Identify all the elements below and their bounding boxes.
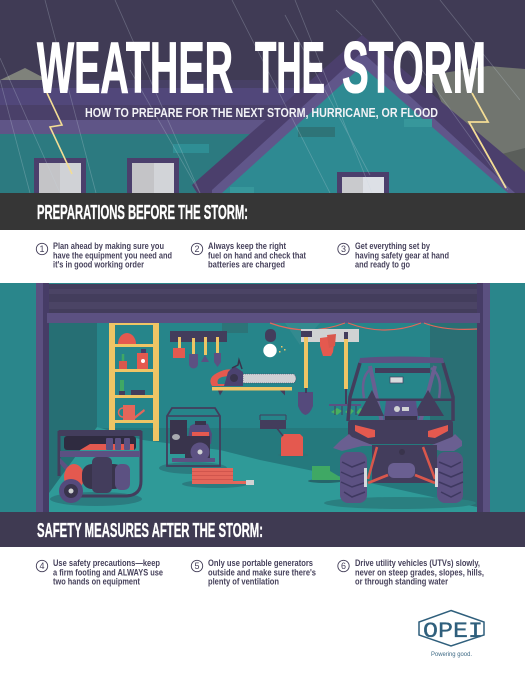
title: THE (255, 28, 325, 108)
step 4: Use safety precautions—keep (53, 558, 160, 568)
shelf unit (109, 323, 159, 441)
step 4: two hands on equipment (53, 576, 140, 586)
step 2: Always keep the right (208, 241, 286, 251)
step 6: or through standing water (355, 576, 448, 586)
band: preparations heading (0, 193, 525, 230)
toolbox (260, 415, 286, 429)
step 4: a firm footing and ALWAYS use (53, 567, 163, 577)
step 3: having safety gear at hand (355, 250, 449, 260)
step 1: have the equipment you need and (53, 250, 172, 260)
step 2: fuel on hand and check that (208, 250, 306, 260)
band: safety heading: SAFETY MEASURES AFTER THE STORM: (37, 520, 263, 542)
step 1 (36, 241, 172, 270)
step 1: Plan ahead by making sure you (53, 241, 164, 251)
hose (182, 468, 254, 488)
step 5: 5 (194, 561, 200, 571)
wheels (340, 452, 367, 503)
step 3: 3 (341, 244, 346, 254)
title: WEATHER (37, 28, 233, 108)
wall rack with shovel, gloves and rake (298, 329, 362, 415)
step 3 (338, 241, 449, 270)
step 5: plenty of ventilation (208, 576, 279, 586)
step 6 (338, 558, 484, 586)
step 5: outside and make sure there's (208, 567, 316, 577)
step 2 (191, 241, 306, 270)
small generator (159, 408, 227, 474)
step 1: it's in good working order (53, 260, 144, 270)
logo: OPEI: OPEI (423, 619, 483, 644)
step 3: Get everything set by (355, 241, 431, 251)
step 2: batteries are charged (208, 260, 285, 270)
step 2: 2 (194, 244, 200, 254)
band: preparations heading: PREPARATIONS BEFORE THE STORM: (37, 202, 248, 224)
chainsaw on shelf (210, 360, 296, 396)
band: safety heading (0, 512, 525, 547)
step 4 (36, 558, 163, 586)
roll cage (348, 356, 453, 423)
step 6: 6 (341, 561, 346, 571)
logo: OPEI (419, 610, 484, 658)
step 5: Only use portable generators (208, 558, 313, 568)
large generator (50, 430, 142, 506)
subtitle: HOW TO PREPARE FOR THE NEXT STORM, HURRICANE, OR FLOOD (85, 105, 438, 120)
gas can (276, 427, 308, 457)
light bulb and cord (263, 323, 477, 357)
tool rack (170, 331, 227, 369)
step 5 (191, 558, 316, 586)
storm scene: house roof and sky (0, 0, 525, 193)
garage back wall and floor (49, 323, 477, 512)
green boots (308, 466, 342, 483)
step 6: never on steep grades, slopes, hills, (355, 567, 484, 577)
utility vehicle (324, 356, 476, 509)
garage illustration (0, 283, 525, 512)
body and lights (348, 420, 453, 444)
step 4: 4 (39, 561, 45, 571)
garage door and frame (36, 283, 490, 512)
logo: OPEI: Powering good. (431, 652, 472, 658)
step 3: and ready to go (355, 260, 410, 270)
step 1: 1 (39, 244, 45, 254)
step 6: Drive utility vehicles (UTVs) slowly, (355, 558, 480, 568)
